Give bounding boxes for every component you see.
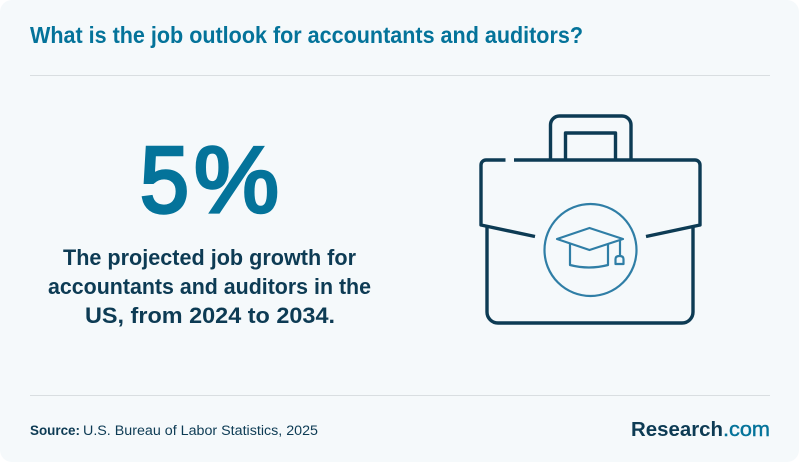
logo: Research.com: .com <box>723 419 770 441</box>
source note: U.S. Bureau of Labor Statistics, 2025 <box>83 423 318 438</box>
big statistic: 5%: % <box>194 127 279 232</box>
statistic description: US, from 2024 to 2034. <box>85 303 335 328</box>
logo: Research.com <box>631 419 770 441</box>
title: What is the job outlook for accountants and auditors? <box>30 22 583 48</box>
big statistic: 5% <box>140 127 279 232</box>
source note: Source: <box>30 423 80 438</box>
statistic description: The projected job growth for <box>63 245 356 270</box>
icon: briefcase with graduation cap <box>481 116 700 323</box>
statistic description: accountants and auditors in the <box>48 274 371 299</box>
big statistic: 5%: 5 <box>140 127 189 232</box>
graduation cap badge <box>544 204 636 296</box>
logo: Research.com: Research <box>631 419 723 441</box>
statistic description <box>48 245 371 328</box>
briefcase outline <box>481 116 700 323</box>
